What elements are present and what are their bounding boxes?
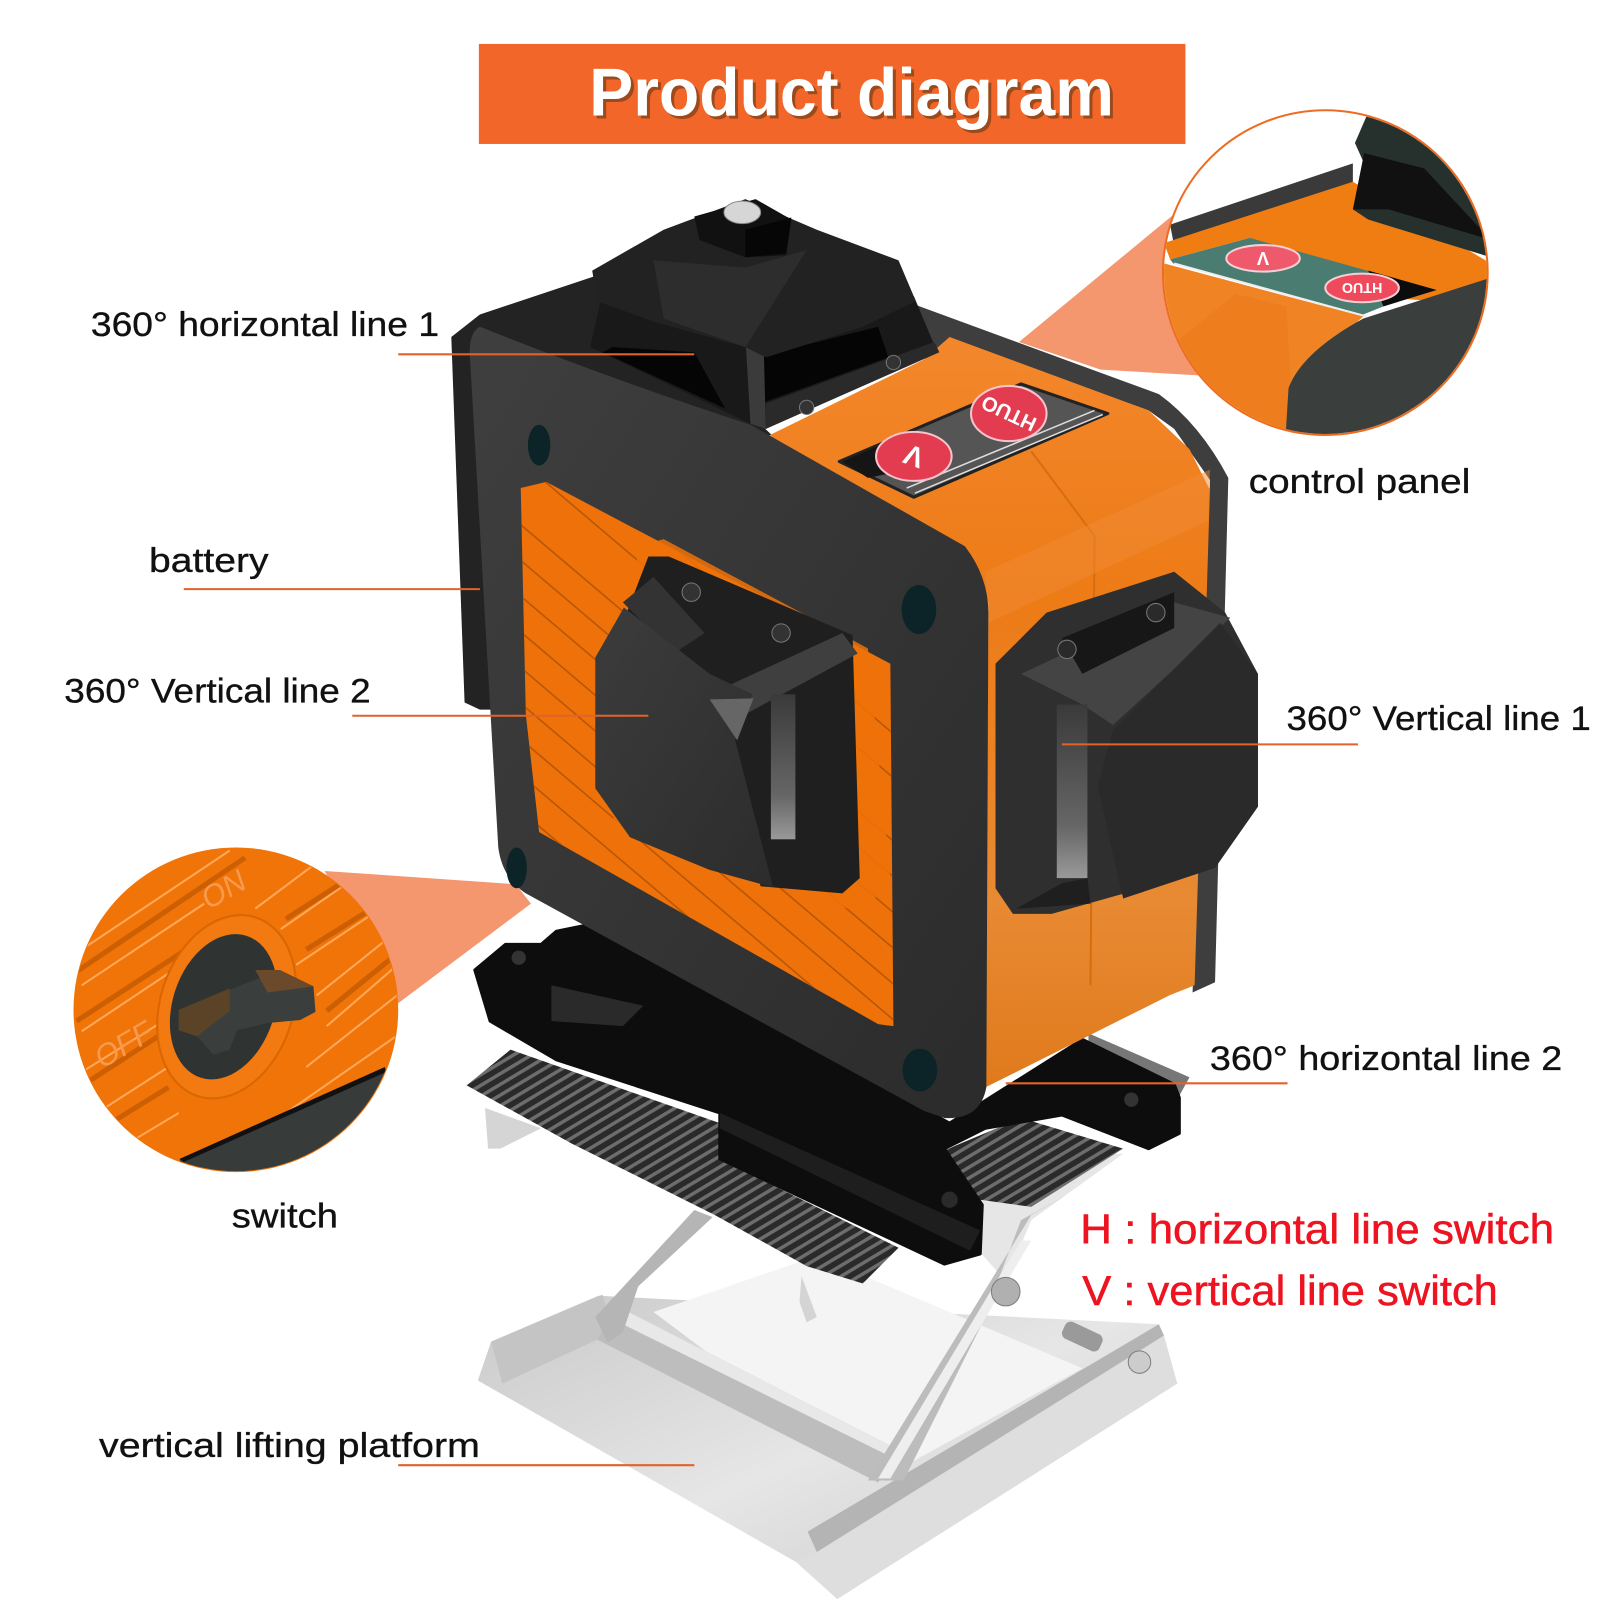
title banner: Product diagram [592, 58, 1117, 133]
black mount base [475, 924, 1179, 1264]
callout wedge: control panel [1019, 212, 1205, 376]
rear bumper [914, 304, 1228, 992]
switch disc [170, 934, 275, 1080]
callout wedge: switch [325, 871, 531, 1005]
title banner: Product diagram [589, 55, 1114, 130]
serrated top rail [467, 1033, 1190, 1283]
orange side housing [766, 337, 1210, 1087]
OFF marking: OFF [89, 1014, 161, 1075]
title banner [479, 44, 1185, 144]
lower orange [1154, 263, 1363, 434]
front window [771, 694, 795, 839]
battery compartment [451, 274, 776, 710]
inset: control panel: HTUO [1342, 279, 1382, 295]
label: 360 horizontal line 1: 360° horizontal line 1 [91, 306, 439, 344]
label: vertical lifting platform: vertical lifting platform [99, 1427, 480, 1465]
inset: control panel: V [1256, 248, 1269, 269]
ON marking: ON [195, 863, 253, 916]
bottom dark bumper [180, 1072, 385, 1172]
right laser module [996, 572, 1258, 914]
label: 360 horizontal line 2: 360° horizontal line 2 [1210, 1040, 1562, 1078]
note: V switch: V : vertical line switch [1082, 1267, 1498, 1314]
control label: V [900, 437, 929, 474]
label: switch: switch [232, 1197, 338, 1235]
control label [839, 384, 1108, 497]
head bracket [1352, 116, 1486, 256]
green panel [1170, 238, 1437, 314]
lifting platform [478, 1154, 1177, 1599]
label: battery: battery [149, 542, 269, 580]
laser body [451, 199, 1258, 1149]
label: 360 vertical line 1: 360° Vertical line 1 [1287, 700, 1591, 738]
switch handle [198, 970, 316, 1054]
label: control panel: control panel [1249, 463, 1470, 501]
inset: switch [71, 847, 408, 1184]
switch collar [156, 914, 296, 1100]
control label: HTUO [978, 390, 1040, 435]
side window [1057, 705, 1087, 878]
side seam [1031, 451, 1095, 985]
inset: control panel [1154, 110, 1501, 449]
front laser module [595, 556, 860, 893]
note: H switch: H : horizontal line switch [1080, 1206, 1554, 1253]
leader lines [184, 354, 1358, 1465]
rear edge strip [1170, 163, 1353, 241]
orange front panel [520, 482, 894, 1026]
dark bumper [1286, 279, 1486, 434]
screw holes [506, 425, 937, 1091]
top laser module [590, 199, 939, 429]
front bumper frame [470, 327, 988, 1118]
label: 360 vertical line 2: 360° Vertical line 2 [64, 672, 371, 710]
